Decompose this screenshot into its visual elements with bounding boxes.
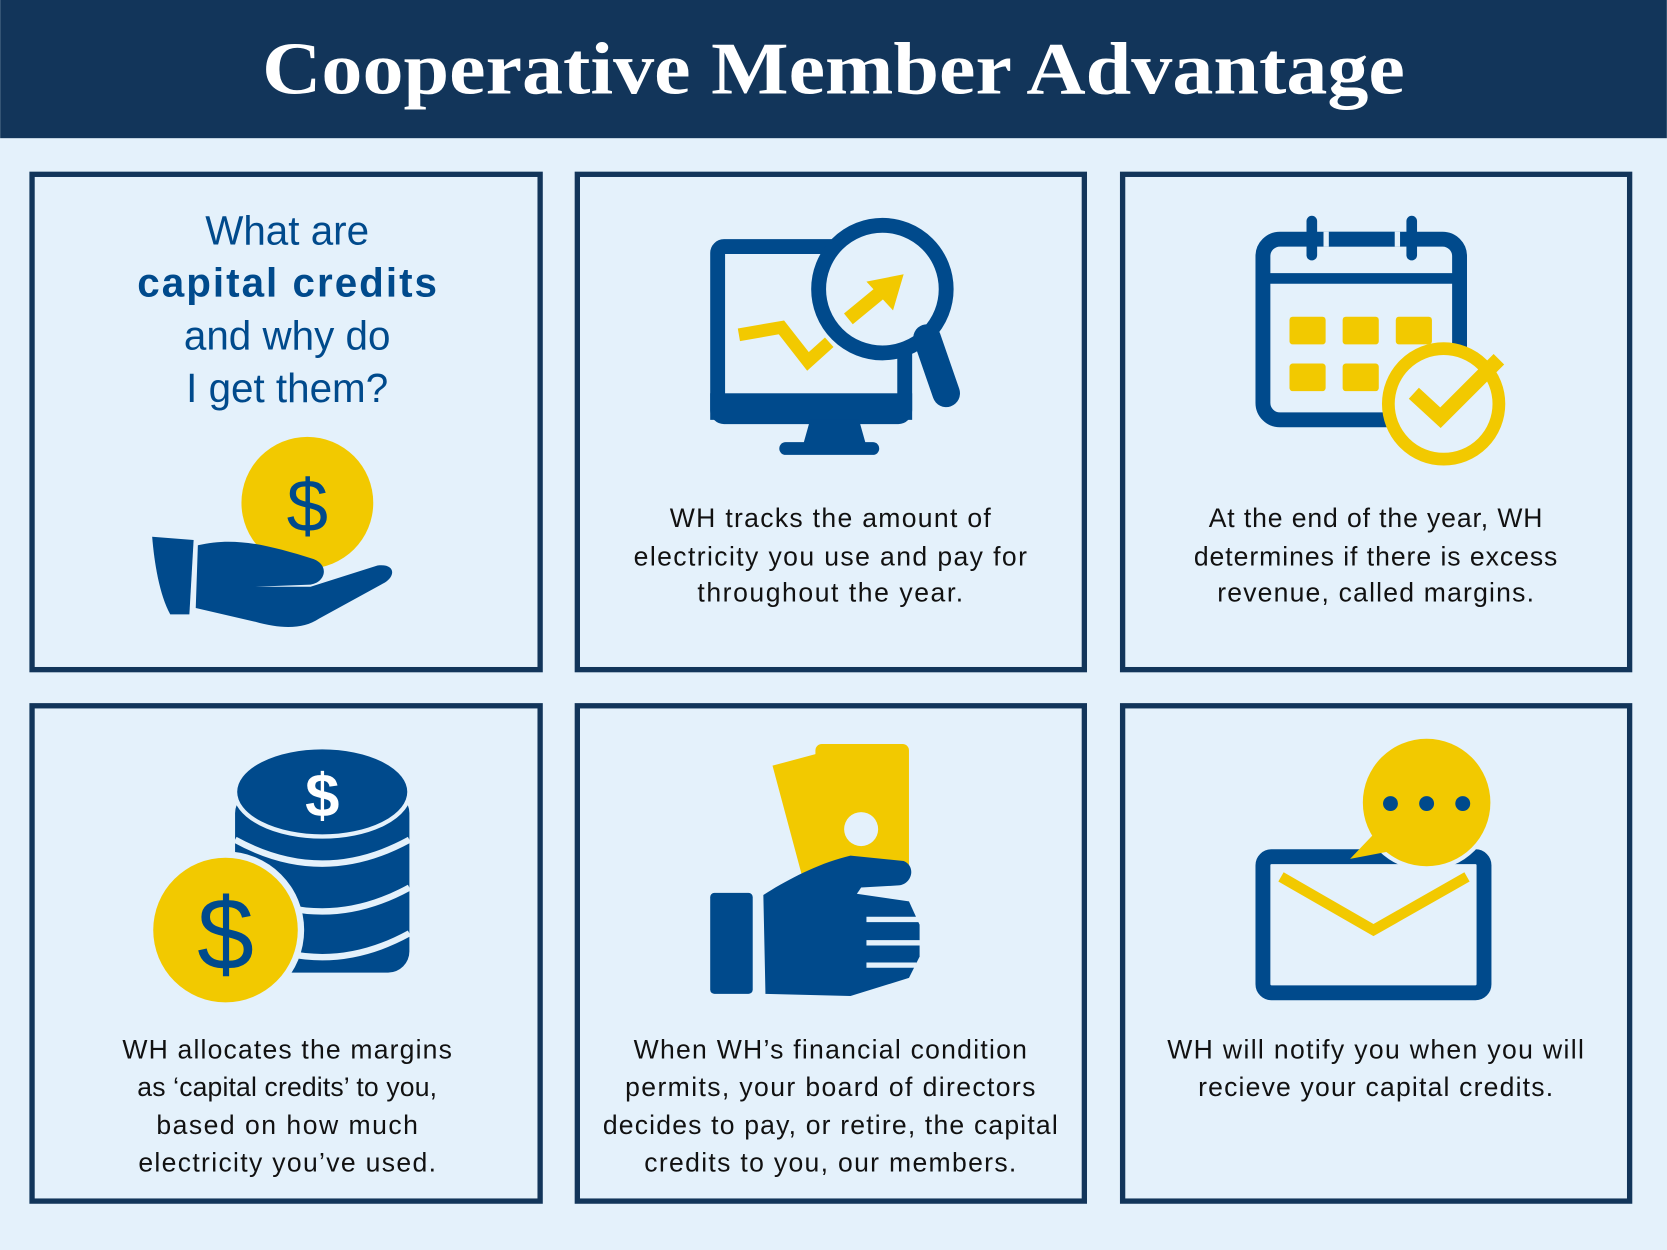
text: electricity you’ve used. [138,1147,436,1177]
heading: capital credits [137,260,437,306]
title: Cooperative Member Advantage [262,29,1405,111]
text: revenue, called margins. [1217,578,1534,608]
icon: hand with coin: $ [287,464,328,547]
text: throughout the year. [697,578,963,608]
panel: allocation [32,706,540,1201]
icon: coin stack: $ [305,761,339,830]
text: credits to you, our members. [644,1147,1016,1177]
panel: retire [577,706,1084,1201]
panel: notify [1123,706,1630,1201]
text: permits, your board of directors [625,1072,1035,1102]
text: as ‘capital credits’ to you, [137,1072,437,1102]
heading: and why do [184,313,390,359]
panel: tracking [577,174,1084,670]
text: WH allocates the margins [122,1035,452,1065]
header bar [0,0,1667,138]
icon: hand with cash [710,744,921,996]
text [634,503,1027,608]
heading: I get them? [186,365,388,411]
text: based on how much [156,1110,418,1140]
icon: hand with coin [152,437,392,627]
text [1167,1035,1584,1102]
heading: What are [205,207,369,253]
text: At the end of the year, WH [1209,503,1542,533]
icon: calendar with check [1263,221,1499,459]
icon: monitor with magnifier [710,225,946,455]
text: WH tracks the amount of [670,503,991,533]
text [603,1035,1058,1177]
icon: envelope with chat bubble [1263,734,1495,993]
panel: what are capital credits [32,174,540,670]
text [1194,503,1557,608]
text: decides to pay, or retire, the capital [603,1110,1058,1140]
text: WH will notify you when you will [1167,1035,1584,1065]
icon: coin stack: $ [197,877,254,991]
panel: end of year [1123,174,1630,670]
text [122,1035,452,1177]
text: When WH’s financial condition [634,1035,1027,1065]
text: recieve your capital credits. [1198,1072,1553,1102]
text: electricity you use and pay for [634,541,1027,571]
heading [137,207,437,411]
icon: coin stack [147,747,409,1009]
text: determines if there is excess [1194,541,1557,571]
